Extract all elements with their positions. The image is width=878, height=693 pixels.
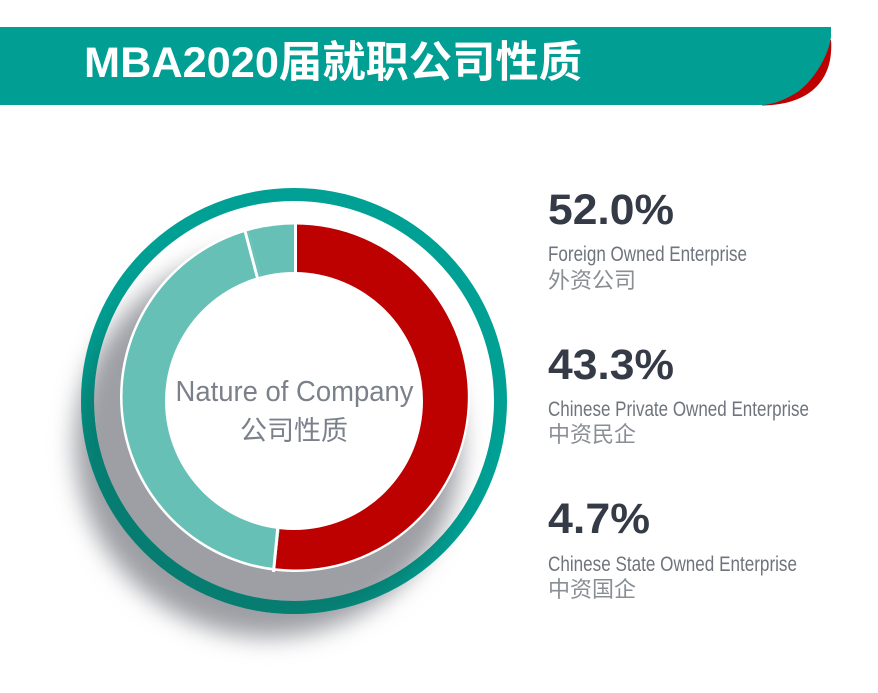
outer ring shaded part	[81, 294, 469, 614]
banner teal band	[0, 27, 831, 105]
legend: chinese private owned: 中资民企	[548, 422, 636, 447]
legend: foreign owned	[548, 186, 747, 293]
center label: 公司性质	[240, 416, 348, 446]
center label	[176, 376, 414, 446]
legend: foreign owned: 52.0%	[548, 186, 674, 234]
header banner	[0, 27, 831, 106]
white disc edge	[120, 222, 470, 572]
segment: foreign owned 52.0%	[275, 224, 468, 569]
legend: foreign owned: 外资公司	[548, 268, 636, 293]
center hole	[165, 272, 423, 530]
segment: chinese private owned 43.3%	[123, 231, 295, 568]
legend: chinese state owned: 4.7%	[548, 495, 650, 543]
banner red crescent	[760, 40, 831, 106]
legend: chinese private owned: Chinese Private Owned Enterprise	[548, 398, 809, 421]
legend: chinese private owned: 43.3%	[548, 341, 674, 389]
legend: foreign owned: Foreign Owned Enterprise	[548, 243, 747, 266]
legend: chinese state owned: 中资国企	[548, 577, 636, 602]
legend: chinese private owned	[548, 341, 809, 447]
legend: chinese state owned	[548, 495, 797, 602]
donut chart	[75, 194, 500, 637]
segment: chinese state owned 4.7%	[248, 224, 295, 397]
segment separators	[245, 222, 296, 572]
title: MBA2020届就职公司性质	[84, 39, 582, 87]
drop shadow	[75, 251, 461, 637]
outer ring	[88, 194, 500, 608]
legend: chinese state owned: Chinese State Owned Enterprise	[548, 553, 797, 576]
center label: Nature of Company	[176, 376, 414, 408]
